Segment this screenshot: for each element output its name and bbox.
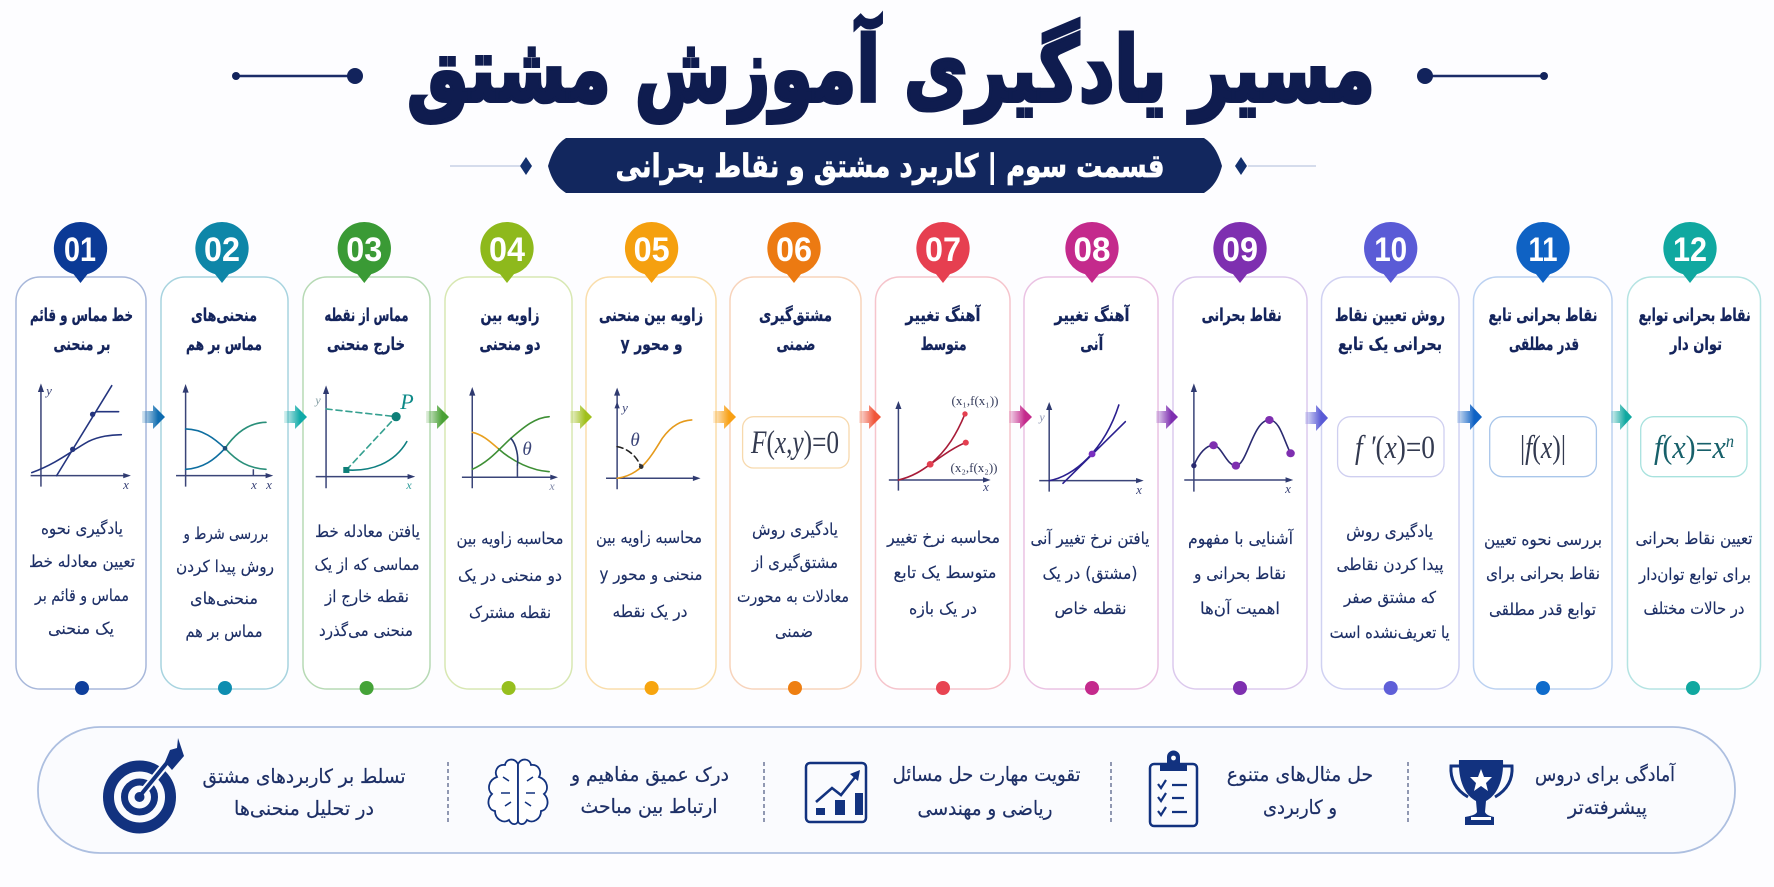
heading 02: منحنی‌های (191, 306, 257, 326)
formula box: power function (1641, 417, 1747, 477)
body 08 (1030, 529, 1150, 618)
heading 06: ضمنی (776, 335, 816, 355)
heading 04 (480, 306, 541, 355)
text: advanced readiness: آمادگی برای دروس (1535, 762, 1676, 786)
panel: step 07 (876, 222, 1010, 695)
body 09 (1188, 529, 1294, 618)
body 01: تعیین معادله خط (29, 552, 135, 571)
subtitle pill (548, 138, 1222, 193)
heading 02: مماس بر هم (186, 335, 262, 355)
body 03 (314, 522, 420, 641)
arrow 6 to 7 (859, 405, 881, 429)
footer dot 01 (75, 681, 89, 695)
formula box: power function: n (1726, 431, 1734, 451)
arrow 3 to 4 (426, 405, 449, 429)
heading 03: خارج منحنی (327, 335, 405, 355)
title ornament left (232, 68, 363, 84)
formula box: derivative zero: f ′(x)=0 (1355, 430, 1435, 466)
body 04 (456, 529, 564, 623)
text: varied examples (1227, 763, 1373, 819)
chart: average rate: (x₁,f(x₁)) (952, 393, 998, 408)
chart: tangent from external point (314, 385, 415, 492)
chart: tangent from external point: x (405, 478, 412, 492)
heading 07: آهنگ تغییر (905, 303, 981, 326)
body 12: در حالات مختلف (1644, 599, 1744, 619)
icon: brain (488, 760, 548, 824)
chart: angle between curves (462, 387, 558, 493)
heading 08: آهنگ تغییر (1054, 303, 1130, 326)
body 01: یادگیری نحوه (41, 519, 123, 539)
panel: step 04 (445, 222, 572, 695)
chart: angle with y axis (606, 388, 701, 489)
icon: growth chart (806, 763, 866, 822)
body 06 (737, 520, 849, 641)
body 10: یا تعریف‌نشده است (1330, 623, 1450, 643)
text: deep understanding: درک عمیق مفاهیم و (570, 763, 729, 786)
arrow 11 to 12 (1611, 404, 1632, 430)
body 04: محاسبه زاویه بین (456, 529, 564, 549)
heading 05 (599, 306, 703, 355)
pin 02: 02 (204, 231, 240, 269)
heading 12 (1639, 306, 1751, 355)
body 07: محاسبه نرخ تغییر (886, 528, 1000, 548)
body 04: دو منحنی در یک (458, 566, 562, 586)
icon: target (108, 738, 184, 828)
chart: instantaneous rate (1038, 402, 1144, 497)
body 11: توابع قدر مطلقی (1489, 600, 1596, 620)
heading 01 (30, 306, 133, 355)
formula box: absolute value: |f(x)| (1520, 430, 1566, 466)
body 05: منحنی و محور y (600, 565, 702, 585)
heading 06 (759, 305, 832, 355)
body 05 (596, 528, 702, 622)
chart: tangent curves (176, 384, 273, 492)
body 02: روش پیدا کردن (176, 557, 274, 577)
arrow 1 to 2 (142, 405, 165, 429)
heading 11: قدر مطلقی (1509, 335, 1579, 355)
footer dot 11 (1536, 681, 1550, 695)
footer dot 05 (645, 681, 659, 695)
subtitle ornament right (1235, 157, 1316, 175)
formula box: absolute value (1490, 417, 1596, 477)
arrow 5 to 6 (713, 405, 736, 429)
heading 03: مماس از نقطه (324, 306, 408, 326)
pin 02 (195, 222, 249, 283)
body 12: برای توابع توان‌دار (1638, 565, 1751, 585)
panel: step 09 (1173, 222, 1307, 695)
formula box: power function: f(x)=x (1654, 430, 1727, 466)
panel: step 10 (1322, 222, 1459, 695)
title ornament right (1417, 68, 1548, 84)
heading 10: روش تعیین نقاط (1335, 306, 1445, 326)
pin 04: 04 (489, 231, 525, 269)
panel: benefits bar (38, 727, 1735, 853)
body 06: معادلات به محورت (737, 587, 849, 607)
pin 05 (625, 222, 678, 283)
heading 05: و محور y (621, 335, 683, 355)
pin 01 (54, 222, 107, 283)
panel: step 02 (161, 222, 288, 695)
chart: average rate: x (982, 479, 989, 494)
chart: critical points (1184, 383, 1295, 492)
footer dot 09 (1233, 681, 1247, 695)
chart: instantaneous rate: y (1038, 410, 1045, 424)
body 06: یادگیری روش (752, 520, 838, 540)
footer dot 02 (218, 681, 232, 695)
text: problem solving: ریاضی و مهندسی (918, 797, 1052, 820)
text: varied examples: و کاربردی (1263, 796, 1337, 819)
heading 06: مشتق‌گیری (759, 305, 832, 326)
heading 02 (186, 306, 262, 355)
pin 07: 07 (925, 231, 961, 269)
body 11 (1484, 530, 1602, 620)
body 04: نقطه مشترک (469, 603, 551, 623)
panel: step 12 (1628, 222, 1760, 695)
body 03: نقطه خارج از (324, 587, 409, 607)
text: advanced readiness: پیشرفته‌تر (1567, 796, 1647, 819)
body 11: بررسی نحوه تعیین (1484, 530, 1602, 550)
formula box: implicit (743, 417, 849, 468)
chart: tangent and normal (31, 383, 131, 492)
chart: tangent from external point: P (399, 389, 414, 414)
text: deep understanding (570, 763, 729, 818)
body 09: نقاط بحرانی و (1193, 564, 1286, 584)
arrow 4 to 5 (570, 405, 592, 429)
pin 10 (1364, 222, 1417, 283)
body 02: منحنی‌های (190, 589, 258, 608)
arrow 9 to 10 (1305, 405, 1328, 431)
body 10 (1330, 522, 1450, 643)
arrow 10 to 11 (1457, 404, 1482, 430)
heading 04: دو منحنی (480, 335, 541, 355)
pin 10: 10 (1374, 231, 1407, 269)
pin 04 (480, 222, 534, 283)
pin 03: 03 (346, 231, 382, 269)
body 12 (1636, 529, 1753, 619)
text: mastery (202, 765, 406, 820)
body 07 (886, 528, 1000, 619)
chart: tangent and normal: y (44, 383, 52, 398)
body 11: نقاط بحرانی برای (1486, 564, 1600, 584)
panel: step 08 (1024, 222, 1158, 695)
body 09: آشنایی با مفهوم (1188, 529, 1294, 549)
chart: tangent and normal: x (122, 477, 129, 492)
pin 01: 01 (64, 231, 96, 269)
footer dot 07 (936, 681, 950, 695)
heading 10: بحرانی یک تابع (1338, 335, 1442, 355)
panel: step 03 (303, 222, 430, 695)
heading 11 (1488, 306, 1598, 355)
chart: angle with y axis: y (620, 400, 628, 415)
body 03: مماسی که از یک (314, 555, 420, 575)
body 10: پیدا کردن نقاطی (1336, 555, 1444, 575)
chart: angle with y axis: θ (630, 430, 640, 451)
heading 10 (1335, 306, 1445, 355)
pin 11 (1516, 222, 1570, 283)
heading 08 (1054, 303, 1130, 355)
heading 04: زاویه بین (480, 306, 540, 326)
body 08: (مشتق) در یک (1042, 564, 1138, 584)
body 08: یافتن نرخ تغییر آنی (1030, 529, 1150, 549)
body 01 (29, 519, 135, 638)
text: mastery: در تحلیل منحنی‌ها (234, 797, 374, 820)
panel: step 01 (16, 222, 146, 695)
footer dot 10 (1384, 681, 1398, 695)
footer dot 08 (1085, 681, 1099, 695)
body 06: مشتق‌گیری از (751, 553, 838, 573)
text: advanced readiness (1535, 762, 1676, 819)
body 05: در یک نقطه (612, 602, 688, 622)
footer dot 06 (788, 681, 802, 695)
heading 01: بر منحنی (54, 335, 110, 355)
body 05: محاسبه زاویه بین (596, 528, 702, 548)
icon: clipboard (1150, 750, 1197, 826)
body 10: یادگیری روش (1346, 522, 1433, 542)
pin 12 (1663, 222, 1717, 283)
body 06: ضمنی (775, 622, 813, 641)
footer dot 04 (502, 681, 516, 695)
heading 07: متوسط (921, 335, 967, 355)
body 10: که مشتق صفر (1343, 588, 1436, 608)
text: deep understanding: ارتباط بین مباحث (580, 795, 718, 818)
pin 09 (1213, 222, 1267, 283)
pin 08: 08 (1074, 231, 1110, 269)
text: mastery: تسلط بر کاربردهای مشتق (202, 765, 406, 788)
pin 07 (916, 222, 970, 283)
icon: trophy (1451, 760, 1512, 825)
pin 11: 11 (1528, 231, 1558, 269)
heading 03 (324, 306, 408, 355)
text: problem solving: تقویت مهارت حل مسائل (893, 763, 1081, 786)
panel: step 05 (586, 222, 716, 695)
heading 08: آنی (1080, 332, 1104, 355)
pin 06: 06 (776, 231, 812, 269)
subtitle ornament left (450, 157, 532, 175)
pin 05: 05 (634, 231, 670, 269)
heading 07 (905, 303, 981, 355)
chart: angle between curves: x (548, 479, 555, 493)
text: varied examples: حل مثال‌های متنوع (1227, 763, 1373, 786)
heading 11: نقاط بحرانی تابع (1488, 306, 1598, 326)
chart: tangent curves: x (250, 477, 257, 492)
chart: average rate (889, 393, 998, 494)
title: مسیر یادگیری آموزش مشتق (407, 15, 1375, 123)
chart: tangent from external point: y (314, 393, 321, 407)
axis label x: x (1284, 481, 1291, 496)
arrow 8 to 9 (1156, 405, 1178, 429)
subtitle text: قسمت سوم | کاربرد مشتق و نقاط بحرانی (616, 147, 1164, 186)
body 08: نقطه خاص (1054, 599, 1126, 618)
pin 03 (338, 222, 391, 283)
body 12: تعیین نقاط بحرانی (1636, 529, 1753, 549)
pin 12: 12 (1673, 231, 1707, 269)
chart: tangent curves: x (265, 477, 272, 492)
body 02 (176, 524, 274, 642)
body 07: متوسط یک تابع (894, 563, 996, 583)
text: problem solving (893, 763, 1081, 820)
chart: average rate: (x₂,f(x₂)) (951, 460, 997, 475)
footer dot 12 (1686, 681, 1700, 695)
body 02: بررسی شرط و (183, 524, 268, 544)
heading 12: توان دار (1669, 335, 1722, 355)
formula box: derivative zero (1338, 417, 1444, 477)
body 01: یک منحنی (48, 619, 114, 638)
heading 01: خط مماس و قائم (30, 306, 133, 326)
body 03: منحنی می‌گذرد (319, 621, 413, 641)
body 01: مماس و قائم بر (34, 586, 129, 606)
body 07: در یک بازه (909, 599, 977, 619)
body 02: مماس بر هم (186, 622, 262, 642)
arrow 2 to 3 (284, 405, 307, 429)
footer dot 03 (360, 681, 374, 695)
pin 09: 09 (1222, 231, 1258, 269)
heading 09: نقاط بحرانی (1202, 306, 1282, 326)
pin 06 (767, 222, 821, 283)
formula box: implicit: F(x,y)=0 (750, 425, 839, 461)
arrow 7 to 8 (1009, 405, 1032, 429)
panel: step 06 (730, 222, 861, 695)
panel: step 11 (1474, 222, 1612, 695)
chart: instantaneous rate: x (1135, 482, 1142, 497)
heading 05: زاویه بین منحنی (599, 306, 703, 326)
body 03: یافتن معادله خط (315, 522, 420, 541)
pin 08 (1065, 222, 1119, 283)
chart: angle between curves: θ (522, 439, 532, 460)
body 09: اهمیت آن‌ها (1200, 599, 1280, 618)
